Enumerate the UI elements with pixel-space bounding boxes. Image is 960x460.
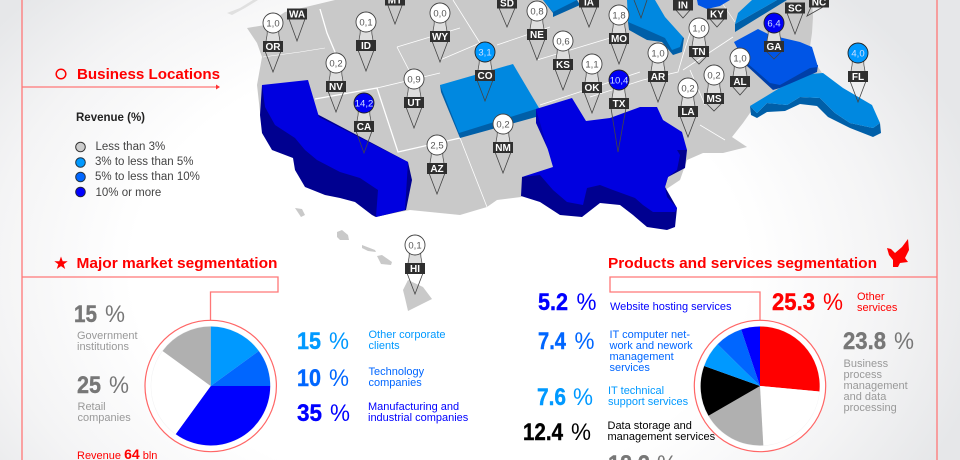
stat: manufacturing — [297, 400, 469, 427]
pin: CA — [354, 93, 374, 153]
state: Colorado — [440, 64, 539, 138]
pin: AR: 1,0 — [651, 48, 665, 60]
pin: TN: 1,0 — [692, 24, 706, 34]
state: Kentucky — [697, 0, 730, 9]
stat: business process: management — [844, 380, 908, 392]
stat: technical support: 7.6 — [537, 384, 566, 411]
stat: technical support: IT technical — [608, 385, 664, 397]
legend: revenue: Revenue (%) — [76, 112, 145, 124]
pin: AR: AR — [651, 72, 666, 83]
stat: government institutions: % — [105, 301, 125, 328]
stat: network management: work and nework — [608, 340, 693, 352]
pin: CO: 3,1 — [478, 48, 492, 58]
stat: business process — [843, 328, 914, 414]
stat: retail companies — [77, 372, 131, 424]
pin: TN: TN — [692, 47, 706, 58]
pin: SC — [785, 2, 805, 34]
pin: UT — [404, 69, 424, 128]
pin: SD — [497, 0, 517, 27]
map: continental US base — [227, 0, 830, 217]
pin: AZ — [427, 135, 447, 194]
pin: MS: 0,2 — [707, 70, 721, 82]
pin: GA — [764, 13, 784, 59]
stat: manufacturing: industrial companies — [368, 412, 469, 424]
stat: technology companies — [297, 365, 425, 392]
icon: star — [54, 256, 68, 269]
stat: other corporate clients: % — [329, 328, 349, 355]
pin: TX: TX — [613, 99, 626, 110]
pin: CA: 14,2 — [355, 98, 373, 110]
stat: manufacturing: % — [330, 400, 350, 427]
pin: WA — [287, 8, 307, 41]
stat: data storage: 12.4 — [523, 419, 564, 446]
pin: MT — [385, 0, 405, 24]
heading: Major market segmentation: Major market segmentation — [76, 255, 278, 272]
pin: NC — [807, 0, 829, 16]
stat: business process: 23.8 — [843, 328, 886, 355]
pin: WY — [430, 3, 450, 62]
pin: KY: KY — [710, 10, 724, 20]
state: Texas — [521, 98, 687, 230]
pie chart: products and services — [694, 320, 826, 452]
stat: website hosting: % — [576, 289, 596, 316]
pin: OK — [582, 54, 602, 113]
pin: AL — [730, 48, 750, 95]
pin: KY — [707, 8, 727, 27]
pin: LA: LA — [681, 107, 695, 118]
pin: NV — [326, 53, 346, 112]
stat: technology companies: % — [329, 365, 349, 392]
pin: ID — [356, 12, 376, 71]
pin: AZ: AZ — [430, 164, 444, 175]
pin: OK: 1,1 — [585, 60, 599, 70]
pin: IA — [579, 0, 599, 27]
stat: business process: and data — [844, 391, 887, 403]
stat: business process: Business — [844, 358, 889, 370]
pin: NE: NE — [530, 30, 544, 41]
pin: UT: UT — [407, 98, 421, 109]
pin: TX — [609, 70, 629, 152]
icon: eagle — [887, 239, 909, 267]
stat: technology companies: Technology — [368, 366, 425, 378]
pin: IN: IN — [678, 0, 688, 12]
stat: other services: % — [823, 289, 843, 316]
pin: MO — [609, 5, 629, 64]
pin: OR: OR — [266, 42, 281, 53]
pin: NE: 0,8 — [530, 6, 544, 18]
stat: business process: processing — [844, 402, 897, 414]
stat: network management: IT computer net- — [610, 329, 690, 341]
stat: other services: services — [857, 302, 898, 314]
pin: AZ: 2,5 — [430, 140, 444, 152]
stat: website hosting: Website hosting services — [610, 301, 732, 313]
stat: technical support: support services — [608, 396, 689, 408]
state: Virginia — [735, 0, 787, 32]
legend: revenue: 10% or more — [96, 187, 161, 199]
state: Illinois — [627, 0, 684, 55]
stat: other services: 25.3 — [772, 289, 815, 316]
map: Hawaii islands — [337, 230, 432, 311]
stat: government institutions: Government — [77, 330, 138, 342]
stat: business process: % — [894, 328, 914, 355]
pin: UT: 0,9 — [407, 74, 421, 86]
legend: revenue: 5% to less than 10% — [95, 171, 200, 183]
pin: GA: GA — [766, 42, 782, 53]
pin: OR: 1,0 — [266, 18, 280, 30]
stat: website hosting: 5.2 — [538, 289, 568, 316]
stat: retail companies: Retail — [78, 401, 106, 413]
stat: business process: process — [844, 369, 883, 381]
pin: ID: 0,1 — [359, 18, 373, 28]
legend: revenue: Less than 3% — [96, 141, 165, 153]
pin: MO: 1,8 — [612, 10, 626, 22]
stat: manufacturing: Manufacturing and — [368, 401, 459, 413]
pin: FL — [848, 43, 868, 102]
pin: NM: NM — [495, 143, 511, 154]
icon: ring bullet — [56, 69, 66, 79]
pin: WY: 0,0 — [433, 8, 447, 20]
stat: technical support: % — [573, 384, 593, 411]
stat: retail companies: % — [109, 372, 129, 399]
pin: SC: SC — [788, 4, 802, 14]
pin: CO — [475, 42, 495, 101]
heading: Products and services segmentation: Products and services segmentation — [608, 255, 877, 272]
pin: WA: WA — [289, 10, 305, 20]
pin: AR — [648, 43, 668, 102]
pin: HI: 0,1 — [408, 240, 422, 252]
pin: OR — [263, 13, 283, 72]
pin: LA: 0,2 — [681, 84, 695, 94]
stat: manufacturing: 35 — [297, 400, 322, 427]
stat: government institutions: institutions — [77, 341, 129, 353]
pin: HI: HI — [410, 264, 420, 275]
pin: AL: AL — [733, 77, 747, 88]
pie chart: major market — [145, 320, 276, 452]
pin: MS: MS — [706, 94, 722, 105]
stat: data storage: management services — [608, 431, 716, 443]
stat: retail companies: companies — [78, 412, 131, 424]
stat: other corporate clients — [297, 328, 446, 355]
pin: MO: MO — [611, 34, 627, 45]
pin: WY: WY — [432, 32, 448, 43]
pin: FL: 4,0 — [851, 48, 865, 60]
pin: FL: FL — [852, 72, 864, 83]
state: Georgia — [734, 29, 818, 90]
stat: other corporate clients: clients — [368, 340, 400, 352]
heading: Business Locations: Business Locations — [77, 66, 220, 83]
pin: NV: 0,2 — [329, 58, 343, 70]
stat: network management: 7.4 — [538, 328, 567, 355]
pin: AL: 1,0 — [733, 54, 747, 64]
pin: NM — [493, 114, 513, 173]
stat: network management — [538, 328, 693, 374]
stat: technology companies: 10 — [297, 365, 321, 392]
stat: data storage: % — [571, 419, 591, 446]
state: Iowa — [543, 0, 580, 17]
stat: government institutions — [74, 301, 138, 353]
pin: TX: 10,4 — [610, 76, 628, 86]
stat: website hosting — [538, 289, 732, 316]
state: Florida — [750, 73, 881, 137]
stat: remaining segment — [608, 451, 677, 460]
pin: IL — [634, 0, 647, 18]
stat: network management: % — [574, 328, 594, 355]
stat: technology companies: companies — [368, 377, 422, 389]
stat: data storage: Data storage and — [608, 420, 692, 432]
pin: CO: CO — [478, 71, 493, 82]
stat: technical support — [537, 384, 689, 411]
stat: data storage — [523, 419, 716, 446]
stat: other corporate clients: Other corporate — [368, 329, 446, 341]
stat: other corporate clients: 15 — [297, 328, 321, 355]
pin: TN — [689, 18, 709, 64]
pin: NV: NV — [329, 82, 343, 93]
pin: OK: OK — [584, 83, 600, 94]
stat: network management: management — [610, 351, 674, 363]
legend: revenue: 3% to less than 5% — [95, 156, 193, 168]
stat: retail companies: 25 — [77, 372, 101, 399]
pin: NM: 0,2 — [496, 120, 510, 130]
pin: KS: KS — [556, 60, 570, 71]
pin: MS — [704, 65, 724, 111]
pin: IN — [673, 0, 693, 18]
state: California — [260, 80, 412, 217]
pin: HI — [405, 235, 425, 294]
stat: other services: Other — [857, 291, 885, 303]
stat: government institutions: 15 — [74, 301, 97, 328]
stat: network management: services — [610, 362, 650, 374]
pin: KS — [553, 31, 573, 90]
pin: ID: ID — [361, 41, 371, 52]
pin: LA — [678, 78, 698, 137]
legend: revenue — [76, 112, 200, 199]
pin: NE — [527, 1, 547, 60]
stat: other services — [772, 289, 898, 316]
pin: CA: CA — [357, 122, 371, 133]
pin: KS: 0,6 — [556, 36, 570, 48]
pin: GA: 6,4 — [767, 18, 781, 30]
